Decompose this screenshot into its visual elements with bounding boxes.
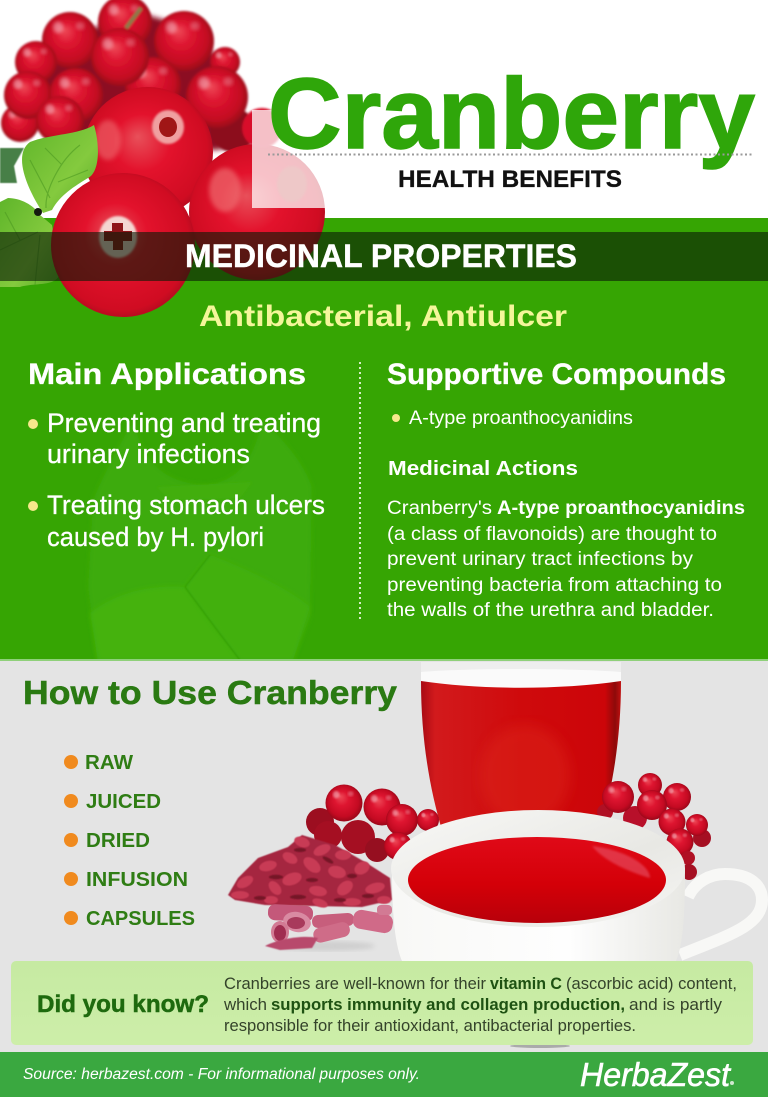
photo: dried cranberries (228, 835, 392, 909)
photo: cranberries left of cup (306, 784, 439, 862)
panel: supportive compounds: (a class of flavonoids) are thought to (387, 524, 717, 545)
photo: cranberries and mint (0, 0, 342, 317)
footer (0, 1052, 768, 1097)
panel: supportive compounds: preventing bacteria from attaching to (387, 575, 722, 596)
mint leaves (22, 125, 98, 213)
callout: did you know (11, 961, 753, 1048)
list: forms of use: JUICED (86, 791, 161, 813)
big berry right (189, 144, 325, 280)
photo: capsules (265, 904, 394, 951)
banner: medicinal properties: MEDICINAL PROPERTIES (185, 238, 577, 274)
heading: Cranberry title: HEALTH BENEFITS (398, 166, 622, 193)
panel: supportive compounds (387, 358, 745, 621)
panel: main applications: Treating stomach ulcers (47, 490, 325, 520)
body silhouette (88, 420, 312, 660)
panel: supportive compounds: A-type proanthocyanidins (497, 498, 745, 519)
white translucent square (252, 110, 342, 208)
panel: supportive compounds: Medicinal Actions (388, 458, 578, 480)
photo: glass of cranberry juice (421, 662, 621, 830)
subheading: properties: Antibacterial, Antiulcer (199, 300, 567, 333)
big berry front (51, 173, 195, 317)
panel: supportive compounds: A-type proanthocyanidins (409, 408, 633, 429)
list: forms of use: DRIED (86, 830, 150, 852)
banner: medicinal properties (0, 232, 768, 281)
panel: main applications: urinary infections (47, 439, 250, 469)
back berry cluster (1, 0, 255, 152)
callout: did you know: responsible for their antioxidant, antibacterial properties. (224, 1017, 636, 1035)
callout: did you know: vitamin C (490, 975, 562, 993)
panel: main applications: Preventing and treating (47, 408, 321, 438)
big berry top (83, 87, 213, 217)
dark side leaf (0, 148, 24, 183)
panel: how to use background (0, 659, 768, 1052)
photo: white cup of cranberry tea (391, 810, 762, 961)
callout: did you know: supports immunity and collagen production, (271, 996, 625, 1014)
list: forms of use (64, 752, 195, 930)
heading: how to use: How to Use Cranberry (23, 674, 398, 711)
panel: main applications (28, 358, 325, 552)
panel: supportive compounds: Cranberry's (387, 498, 492, 519)
callout: did you know: Cranberries are well-known for their (224, 975, 486, 993)
panel: main applications: Main Applications (28, 358, 306, 391)
photo: cranberries right of cup (597, 773, 711, 880)
panel: supportive compounds: prevent urinary tract infections by (387, 549, 694, 570)
footer: Source: herbazest.com - For informational purposes only. (23, 1066, 420, 1083)
callout: did you know: Did you know? (37, 991, 209, 1018)
panel: supportive compounds: the walls of the urethra and bladder. (387, 600, 714, 621)
list: forms of use: INFUSION (86, 869, 188, 891)
list: forms of use: RAW (85, 752, 133, 774)
footer: HerbaZest (580, 1056, 732, 1093)
heading: Cranberry title: Cranberry (268, 58, 755, 170)
panel: supportive compounds: Supportive Compounds (387, 358, 726, 391)
callout: did you know: (ascorbic acid) content, (566, 975, 737, 993)
callout: did you know: and is partly (629, 996, 723, 1014)
callout: did you know: which (223, 996, 267, 1014)
panel: main applications: caused by H. pylori (47, 522, 264, 552)
list: forms of use: CAPSULES (86, 908, 195, 930)
panel: medicinal properties background (0, 218, 768, 660)
